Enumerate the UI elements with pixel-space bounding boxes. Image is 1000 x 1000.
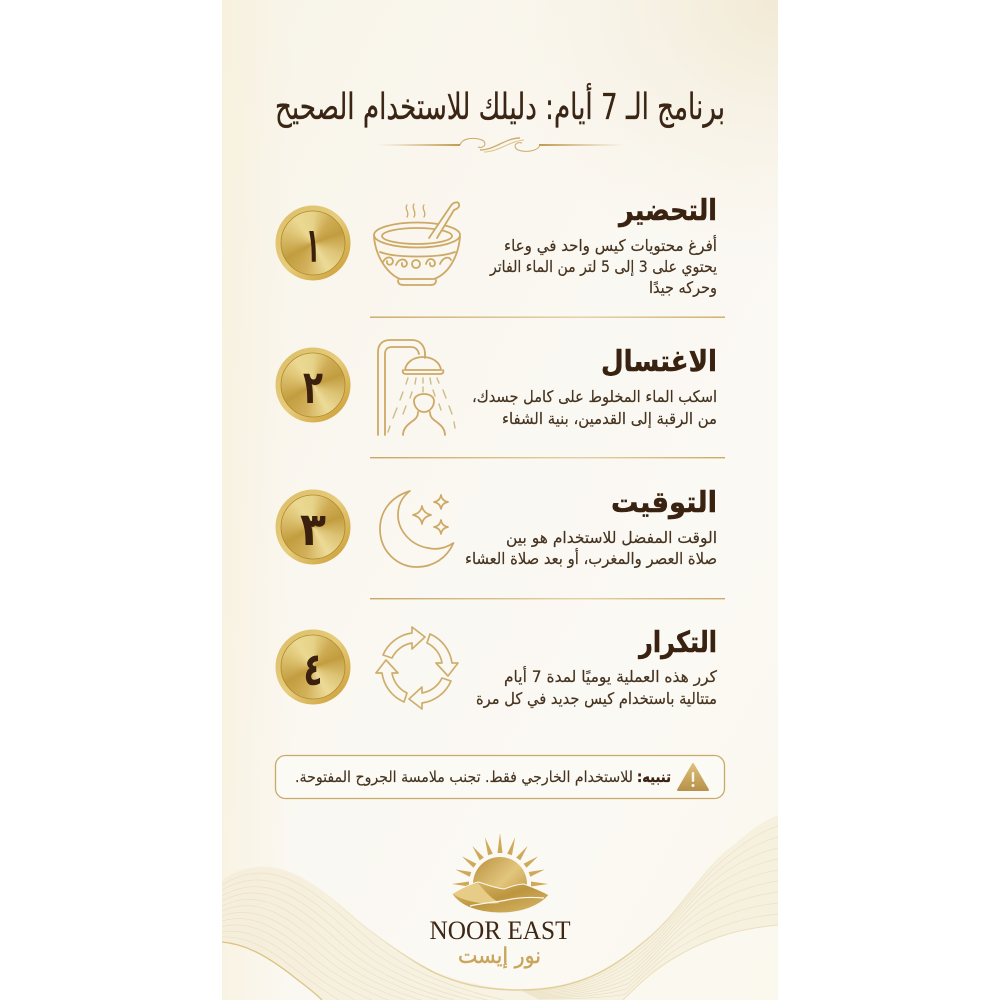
logo sun disc: [473, 857, 527, 911]
logo Arabic wordmark: نور إيست: [458, 944, 541, 969]
logo English wordmark: NOOR EAST: [430, 916, 571, 945]
description: من الرقبة إلى القدمين، بنية الشفاء: [502, 409, 717, 429]
number coin 1: [276, 206, 350, 280]
number coin 3: ٣: [300, 502, 326, 556]
description: اسكب الماء المخلوط على كامل جسدك،: [472, 387, 717, 407]
description: صلاة العصر والمغرب، أو بعد صلاة العشاء: [465, 548, 717, 569]
number coin 3: [276, 490, 350, 564]
icon: shower and person: [378, 340, 455, 435]
heading: التكرار: [637, 625, 717, 659]
description: كرر هذه العملية يوميًا لمدة 7 أيام: [504, 666, 717, 687]
decorative gold waves: [222, 815, 778, 1000]
number coin 4: [276, 630, 350, 704]
description: وحركه جيدًا: [649, 278, 717, 298]
icon: crescent moon and stars: [380, 491, 454, 567]
description: يحتوي على 3 إلى 5 لتر من الماء الفاتر: [489, 257, 717, 277]
warning label: تنبيه:: [637, 768, 671, 786]
number coin 1: ١: [307, 218, 319, 272]
number coin 2: ٢: [303, 360, 323, 414]
warning callout: [276, 756, 724, 798]
step 4: repetition: [276, 625, 717, 709]
title: برنامج الـ 7 أيام: دليلك للاستخدام الصحيح: [275, 83, 725, 128]
description: [465, 528, 717, 569]
logo: Noor East: [430, 833, 571, 969]
description: أفرغ محتويات كيس واحد في وعاء: [504, 235, 717, 256]
heading: الاغتسال: [601, 344, 717, 378]
description: متتالية باستخدام كيس جديد في كل مرة: [476, 689, 717, 709]
description: [489, 235, 717, 298]
icon: soup bowl with spoon: [374, 202, 460, 285]
number coin 2: [276, 348, 350, 422]
icon: warning triangle: [678, 764, 708, 790]
title ornament divider: [378, 138, 623, 152]
warning text: للاستخدام الخارجي فقط. تجنب ملامسة الجروح المفتوحة.: [295, 768, 633, 787]
description: [472, 387, 717, 429]
description: [476, 666, 717, 709]
panel: cream paper background: [222, 0, 778, 1000]
logo dunes: [452, 882, 549, 913]
number coin 4: ٤: [304, 642, 322, 696]
step 2: bathing: [276, 340, 717, 435]
heading: التحضير: [617, 193, 717, 227]
step 3: timing: [276, 485, 717, 569]
description: الوقت المفضل للاستخدام هو بين: [506, 528, 717, 548]
heading: التوقيت: [611, 485, 717, 519]
icon: circular arrows: [376, 627, 458, 709]
logo sun rays: [452, 833, 548, 886]
step 1: preparation: [276, 193, 717, 298]
